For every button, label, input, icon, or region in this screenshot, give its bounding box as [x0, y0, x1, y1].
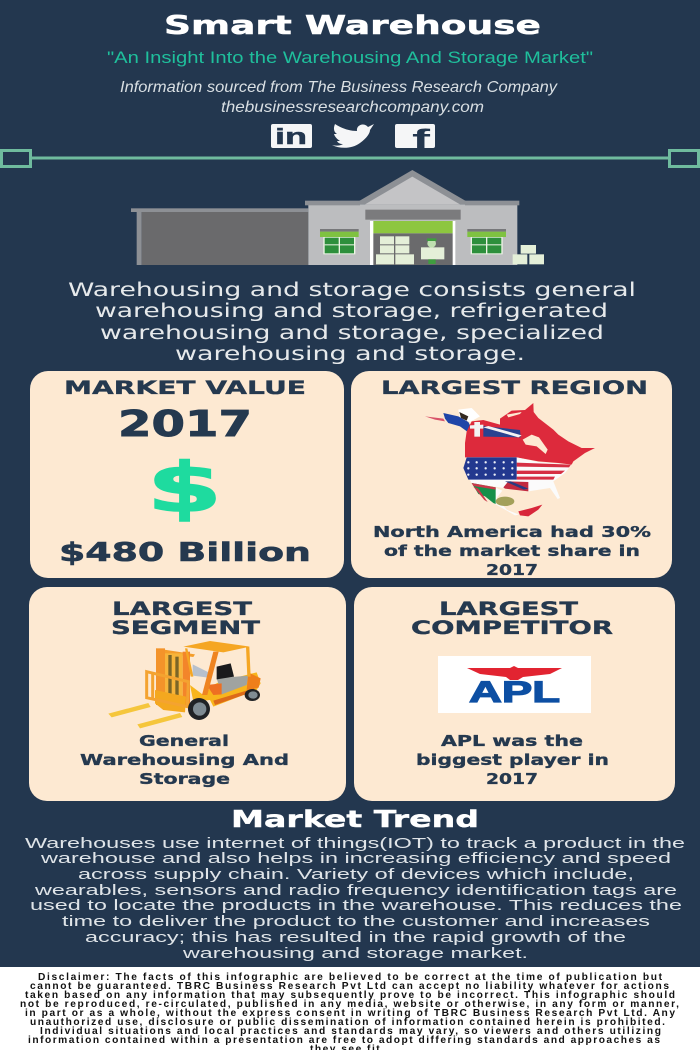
disclaimer panel	[0, 967, 700, 1050]
heading: LARGEST	[112, 598, 252, 620]
market trend paragraph: time to deliver the product to the customer and increases	[62, 914, 650, 930]
intro paragraph: Warehousing and storage consists general	[68, 280, 636, 301]
market trend paragraph: used to locate the products in the warehouse. This reduces the	[30, 898, 682, 914]
icon: forklift	[108, 641, 261, 728]
disclaimer text: taken based on any information that may subsequently prove to be incorrect. This infographic should	[25, 990, 675, 1001]
disclaimer text: unauthorized use, disclosure or public dissemination of information contained herein is prohibited.	[30, 1017, 665, 1028]
heading: SEGMENT	[111, 617, 260, 639]
heading	[411, 598, 614, 639]
caption	[416, 732, 609, 788]
heading: LARGEST	[439, 598, 578, 620]
market trend paragraph: warehouse and also helps in increasing efficiency and speed	[39, 851, 671, 867]
caption	[373, 523, 652, 579]
panel: largest region	[351, 371, 672, 579]
caption: biggest player in	[416, 751, 609, 769]
caption: 2017	[486, 770, 538, 788]
intro paragraph	[68, 280, 636, 365]
divider line with end squares	[2, 150, 698, 166]
heading	[111, 598, 260, 639]
source line: Information sourced from The Business Research Company	[120, 79, 558, 96]
title: Smart Warehouse	[164, 11, 541, 41]
subtitle: "An Insight Into the Warehousing And Storage Market"	[107, 48, 593, 67]
icon: facebook	[395, 124, 435, 154]
intro paragraph: warehousing and storage.	[175, 344, 525, 365]
market trend paragraph: warehousing and storage market.	[181, 946, 528, 962]
intro paragraph: warehousing and storage, refrigerated	[95, 301, 608, 322]
market trend paragraph: wearables, sensors and radio frequency identification tags are	[33, 883, 677, 899]
warehouse illustration	[131, 170, 544, 265]
caption: Warehousing And	[80, 751, 289, 769]
disclaimer text: information contained within a presentation are free to adopt differing standards and approaches as	[28, 1035, 660, 1046]
caption: APL was the	[441, 732, 583, 750]
map: North America in flags	[425, 403, 595, 516]
caption: 2017	[486, 561, 538, 579]
heading: COMPETITOR	[411, 617, 614, 639]
panel: largest segment	[29, 587, 346, 801]
caption: of the market share in	[384, 542, 640, 560]
disclaimer text: Individual situations and local practices and standards may vary, so viewers and others utilizing	[40, 1026, 661, 1037]
icon: linkedin	[271, 124, 312, 149]
logo: APL: APL	[469, 676, 560, 709]
market trend paragraph	[25, 836, 685, 962]
website: thebusinessresearchcompany.com	[221, 99, 484, 116]
market trend paragraph: accuracy; this has resulted in the rapid growth of the	[85, 930, 626, 946]
panel: market value	[30, 371, 344, 578]
disclaimer text	[20, 972, 679, 1050]
caption	[80, 732, 289, 788]
icon: linkedin: in	[275, 124, 307, 149]
year: 2017	[118, 404, 252, 445]
disclaimer text: not be reproduced, re-circulated, published in any media, website or otherwise, in any form or manner,	[20, 999, 679, 1010]
heading: market trend: Market Trend	[231, 807, 479, 833]
panel: largest competitor	[354, 587, 675, 801]
heading: MARKET VALUE	[64, 377, 306, 399]
disclaimer text: cannot be guaranteed. TBRC Business Research Pvt Ltd can accept no liability whatever for actions	[30, 981, 669, 992]
icon: facebook: f	[412, 124, 432, 154]
disclaimer text: Disclaimer: The facts of this infographic are believed to be correct at the time of publication but	[38, 972, 663, 983]
market trend paragraph: across supply chain. Variety of devices which include,	[78, 867, 634, 883]
icon: twitter	[332, 124, 375, 148]
intro paragraph: warehousing and storage, specialized	[100, 323, 604, 344]
disclaimer text: in part or as a whole, without the express consent in writing of TBRC Business Research Pvt Ltd. Any	[25, 1008, 675, 1019]
caption: Storage	[139, 770, 230, 788]
caption: North America had 30%	[373, 523, 652, 541]
heading: LARGEST REGION	[381, 377, 648, 399]
logo: APL	[438, 656, 591, 713]
market trend paragraph: Warehouses use internet of things(IOT) to track a product in the	[25, 836, 685, 852]
caption: General	[139, 732, 229, 750]
value: $480 Billion	[59, 538, 311, 568]
icon: dollar sign: $	[147, 449, 222, 528]
